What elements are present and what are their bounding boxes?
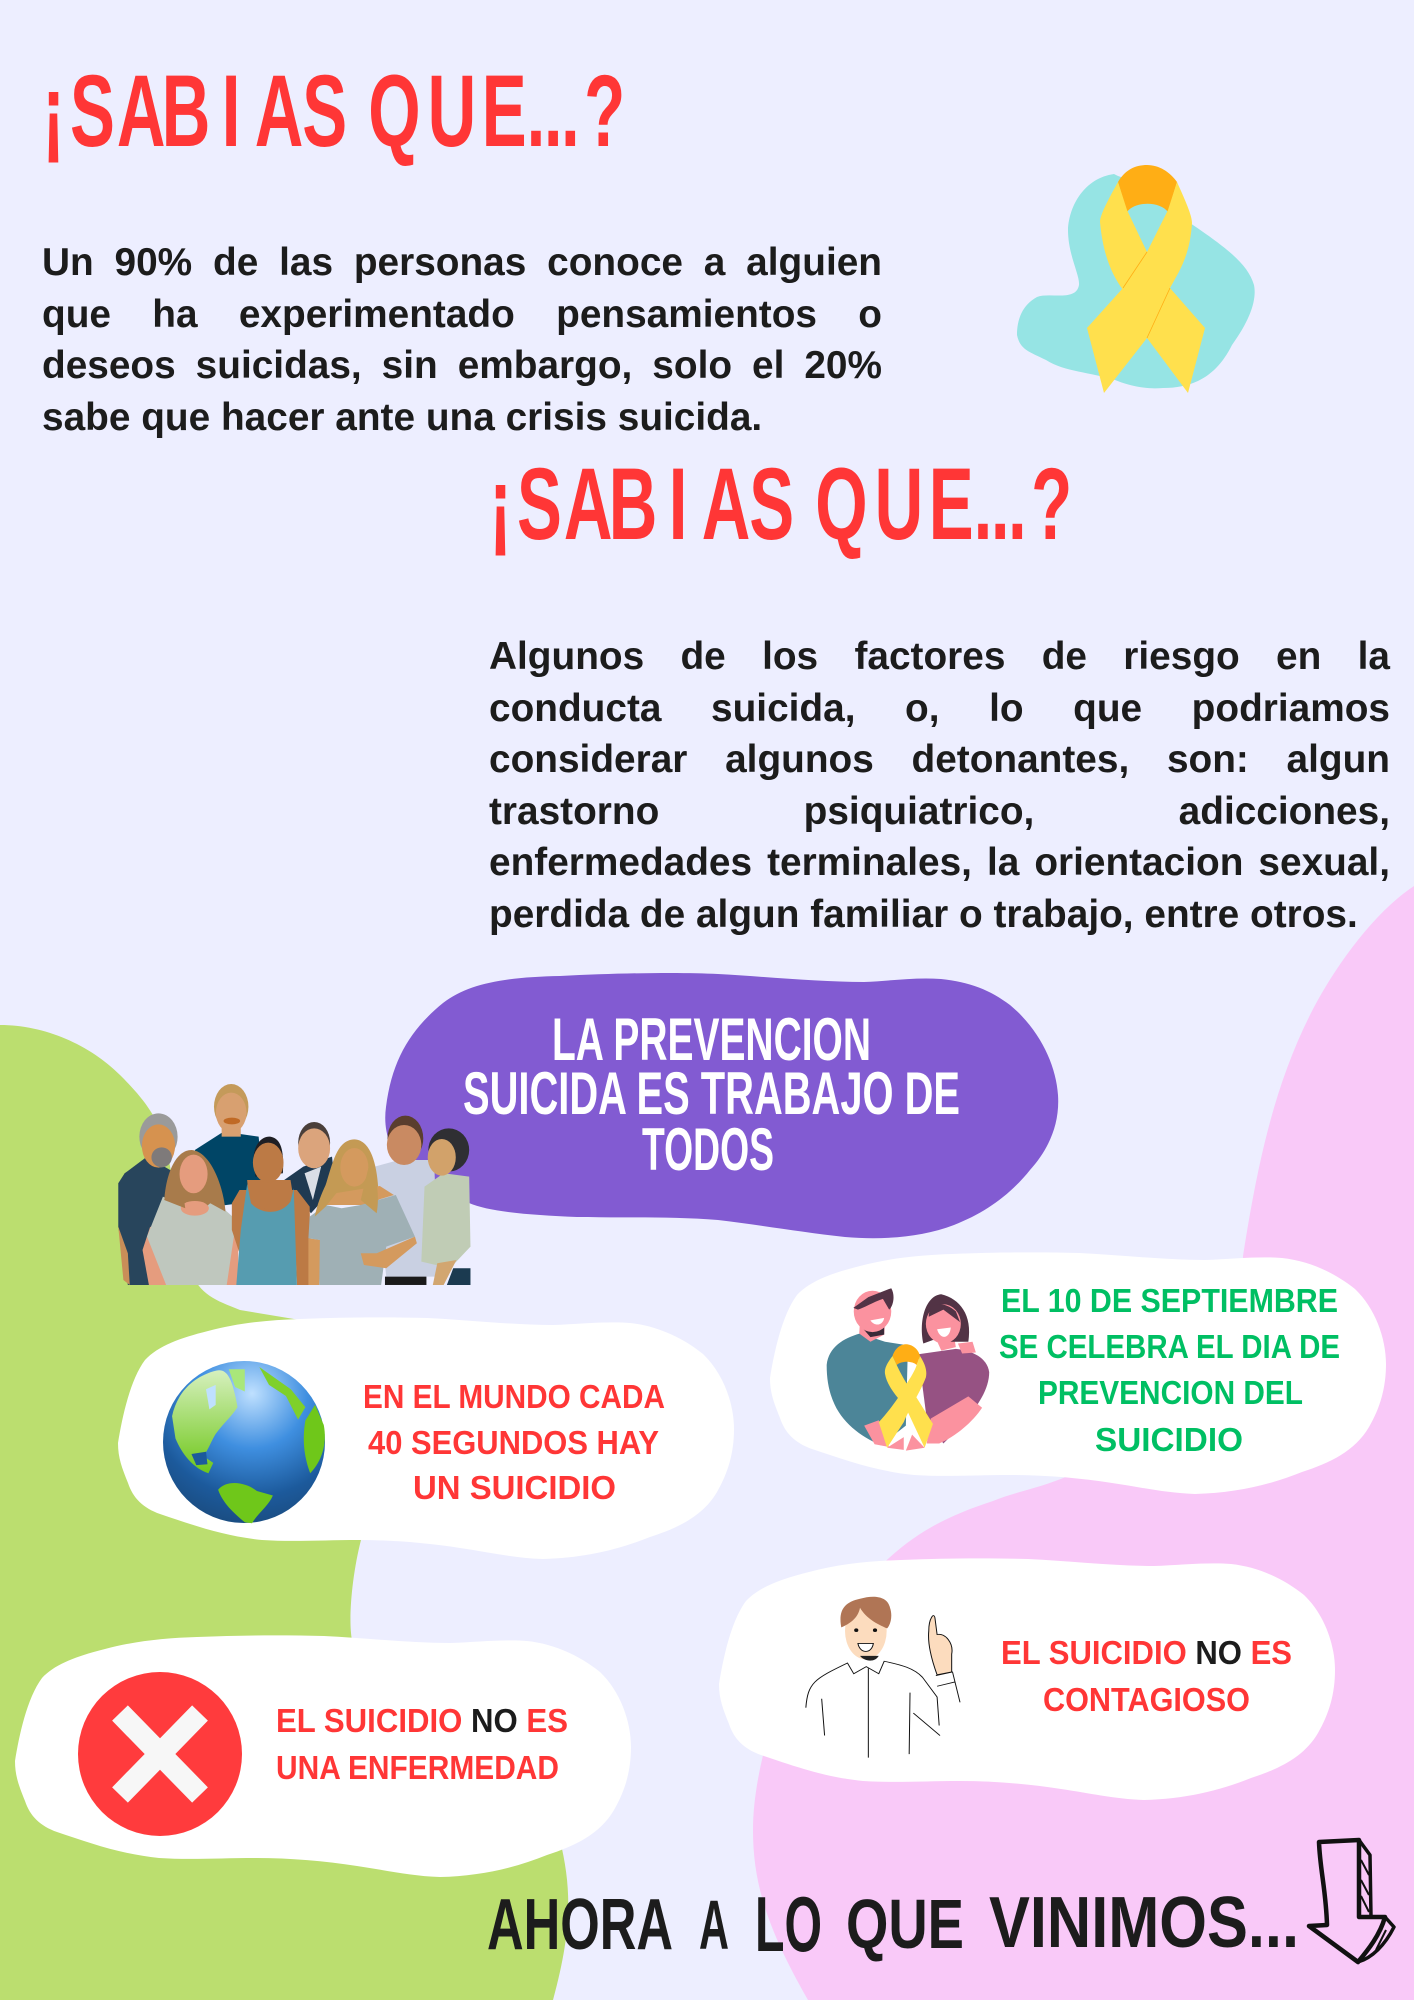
text block: risk factors paragraph	[489, 635, 1390, 936]
text block: statistics paragraph	[42, 241, 882, 439]
text block: risk factors paragraph: trastorno psiquiatrico, adicciones,	[489, 790, 1390, 833]
heading: sabias que 2: ¡SABIAS QUE...?	[489, 448, 1072, 561]
panel: world pill: 40 SEGUNDOS HAY	[368, 1424, 659, 1461]
text block: statistics paragraph: deseos suicidas, sin embargo, solo el 20%	[42, 344, 882, 387]
heading: sabias que 1: ¡SABIAS QUE...?	[42, 55, 625, 168]
panel: contagion pill: CONTAGIOSO	[1043, 1681, 1250, 1718]
panel: contagion pill	[719, 1558, 1335, 1800]
text block: statistics paragraph: que ha experimentado pensamientos o	[42, 293, 882, 336]
closing line: QUE	[846, 1885, 964, 1963]
closing line	[487, 1880, 1299, 1968]
panel: purple prevention banner: LA PREVENCION	[552, 1006, 871, 1073]
illustration: group of people	[118, 1084, 470, 1285]
panel: world pill: UN SUICIDIO	[413, 1469, 616, 1506]
closing line: AHORA	[487, 1885, 673, 1965]
panel: world pill	[118, 1317, 734, 1559]
text block: risk factors paragraph: enfermedades terminales, la orientacion sexual,	[489, 841, 1390, 884]
icon: hand-drawn down arrow	[1309, 1840, 1394, 1962]
text block: risk factors paragraph: conducta suicida, o, lo que podriamos	[489, 687, 1390, 730]
closing line: VINIMOS...	[989, 1883, 1299, 1963]
green background blob	[0, 1025, 568, 2000]
text block: statistics paragraph: sabe que hacer ante una crisis suicida.	[42, 396, 762, 439]
panel: date pill: PREVENCION DEL	[1038, 1374, 1303, 1411]
panel: world pill: EN EL MUNDO CADA	[363, 1378, 665, 1415]
panel: not a disease pill: EL SUICIDIO NO ES	[276, 1702, 568, 1739]
panel: date pill: SE CELEBRA EL DIA DE	[999, 1328, 1340, 1365]
icon: man pointing up	[806, 1597, 960, 1758]
icon: yellow ribbon on teal blob	[1017, 165, 1255, 393]
text block: risk factors paragraph: considerar algunos detonantes, son: algun	[489, 738, 1390, 781]
text block: risk factors paragraph: Algunos de los factores de riesgo en la	[489, 635, 1390, 678]
panel: contagion pill: EL SUICIDIO NO ES	[1001, 1634, 1292, 1671]
panel: date pill: SUICIDIO	[1095, 1421, 1243, 1458]
text block: risk factors paragraph: perdida de algun familiar o trabajo, entre otros.	[489, 893, 1358, 936]
panel: purple prevention banner: SUICIDA ES TRABAJO DE	[463, 1060, 960, 1127]
icon: red circle with x	[78, 1672, 242, 1836]
panel: not a disease pill: UNA ENFERMEDAD	[276, 1749, 559, 1786]
pink background blob	[753, 886, 1414, 2000]
panel: not a disease pill	[15, 1635, 631, 1877]
icon: couple with ribbon	[827, 1288, 989, 1451]
panel: date pill: EL 10 DE SEPTIEMBRE	[1001, 1282, 1338, 1319]
panel: date pill	[770, 1252, 1386, 1494]
closing line: A	[699, 1886, 729, 1964]
text block: statistics paragraph: Un 90% de las personas conoce a alguien	[42, 241, 882, 284]
panel: purple prevention banner	[385, 973, 1058, 1238]
icon: globe	[163, 1361, 325, 1523]
panel: purple prevention banner: TODOS	[642, 1116, 774, 1183]
closing line: LO	[755, 1880, 822, 1968]
